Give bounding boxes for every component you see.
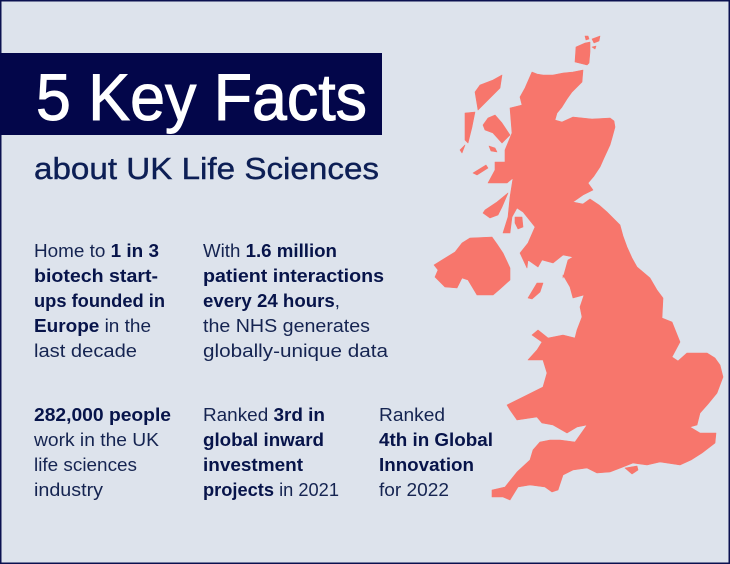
fact: 282,000 people: [33, 405, 171, 500]
fact: ranked 3rd in investment: [203, 405, 339, 500]
fact: 282,000 people: industry: [34, 480, 103, 500]
fact: ranked 3rd in investment: Ranked 3rd in: [203, 405, 325, 425]
Northern Ireland: [434, 237, 510, 295]
title banner: [0, 53, 382, 135]
Arran: [515, 217, 523, 229]
fact: biotech start-ups: biotech start-: [34, 266, 158, 286]
Isle of Man: [528, 283, 543, 299]
Islay and Jura: [483, 193, 508, 218]
title: 5 Key Facts: [36, 60, 367, 134]
Orkney and Shetland: [575, 36, 600, 65]
fact: ranked 4th in innovation: Ranked: [379, 405, 445, 425]
fact: biotech start-ups: Home to 1 in 3: [34, 241, 159, 261]
fact: NHS patient interactions: [203, 241, 389, 361]
Isle of Wight: [625, 466, 638, 474]
fact: ranked 4th in innovation: [379, 405, 493, 500]
fact: NHS patient interactions: every 24 hours ,: [203, 291, 340, 311]
fact: ranked 3rd in investment: projects in 2021: [203, 480, 339, 500]
fact: biotech start-ups: [34, 241, 165, 361]
fact: NHS patient interactions: patient interactions: [203, 266, 384, 286]
fact: NHS patient interactions: the NHS generates: [203, 316, 370, 336]
fact: biotech start-ups: Europe in the: [34, 316, 151, 336]
fact: NHS patient interactions: globally-unique data: [203, 341, 389, 361]
fact: ranked 4th in innovation: 4th in Global: [379, 430, 493, 450]
map of the UK: [434, 36, 723, 500]
fact: ranked 4th in innovation: for 2022: [379, 480, 449, 500]
Skye: [483, 115, 510, 143]
fact: NHS patient interactions: With 1.6 million: [203, 241, 337, 261]
Outer Hebrides: [460, 75, 502, 153]
fact: ranked 3rd in investment: investment: [203, 455, 303, 475]
fact: ranked 3rd in investment: global inward: [203, 430, 324, 450]
fact: biotech start-ups: last decade: [34, 341, 137, 361]
fact: 282,000 people: 282,000 people: [34, 405, 171, 425]
Mull and nearby islands: [473, 146, 497, 175]
fact: 282,000 people: work in the UK: [33, 430, 159, 450]
mainland Great Britain: [488, 70, 723, 500]
fact: ranked 4th in innovation: Innovation: [379, 455, 474, 475]
fact: 282,000 people: life sciences: [34, 455, 137, 475]
subtitle: about UK Life Sciences: [34, 151, 379, 186]
fact: biotech start-ups: ups founded in: [34, 291, 165, 311]
